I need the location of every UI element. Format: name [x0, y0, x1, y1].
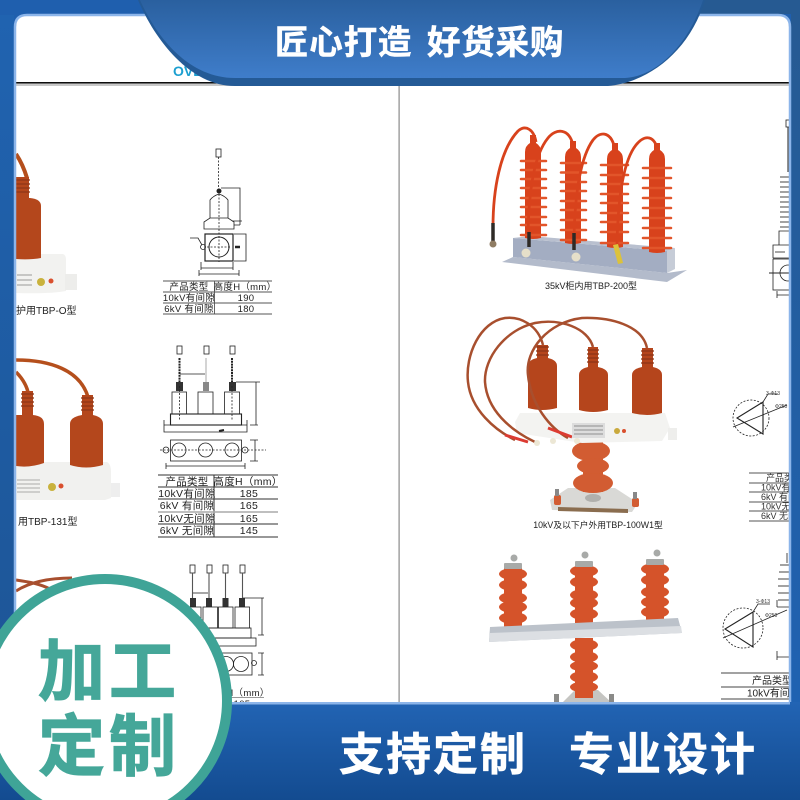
- title: 好货采购: [427, 25, 564, 62]
- dimension drawing: TBP-131: [160, 346, 266, 469]
- clipped catalogue heading: OVER: [173, 63, 213, 79]
- table fragment: four-pole unit: [170, 687, 270, 710]
- slogan: 支持定制: [339, 729, 527, 780]
- table: TBP-O heights: 180: [238, 304, 254, 315]
- banner: bottom strip: [0, 702, 800, 800]
- table: TBP-O heights: 产品类型: [169, 281, 209, 293]
- badge text: 定制: [38, 710, 180, 785]
- dimension drawing: triangle plate upper: [733, 391, 788, 436]
- catalogue content: [16, 63, 800, 710]
- caption: TBP-131: 用TBP-131型: [18, 515, 77, 528]
- title: 匠心打造: [275, 25, 412, 62]
- caption: TBP-100W1: 10kV及以下户外用TBP-100W1型: [533, 519, 663, 530]
- table fragment: right upper: [749, 472, 800, 521]
- dimension drawing: triangle plate upper: 3-Φ13: [766, 391, 780, 397]
- caption: TBP-200: 35kV柜内用TBP-200型: [545, 280, 637, 291]
- table: TBP-O heights: 6kV 有间隙: [164, 303, 214, 315]
- center divider: [398, 86, 400, 704]
- table: TBP-O heights: 190: [238, 293, 254, 304]
- table: TBP-131 heights: 10kV有间隙: [158, 487, 216, 500]
- table: TBP-131 heights: 165: [240, 500, 258, 512]
- table: TBP-O heights: 10kV有间隙: [163, 292, 215, 304]
- table fragment: right lower: 10kV有间隙: [747, 686, 800, 700]
- title: [275, 25, 564, 62]
- caption: TBP-O: 护用TBP-O型: [16, 304, 77, 317]
- product photo: TBP-131: [16, 360, 120, 500]
- table fragment: four-pole unit: H（mm）: [226, 687, 270, 699]
- product photo: 10kV TBP-100W1: [468, 318, 677, 513]
- dimension drawing: triangle plate upper: Φ250: [775, 404, 788, 410]
- product photo: TBP-O: [16, 154, 77, 293]
- product photo: outdoor three-phase unit: [489, 550, 682, 703]
- table fragment: four-pole unit: 105: [234, 699, 250, 710]
- dimension drawing: triangle plate lower: 3-Φ13: [756, 599, 770, 605]
- table: TBP-131 heights: 10kV无间隙: [158, 512, 216, 525]
- table: TBP-131 heights: 6kV 无间隙: [160, 524, 214, 537]
- table: TBP-131 heights: 145: [240, 525, 258, 537]
- banner: top header: [138, 0, 705, 86]
- table: TBP-O heights: 高度H（mm）: [214, 281, 276, 293]
- table: TBP-O heights: [163, 281, 276, 315]
- badge text: [38, 635, 180, 785]
- table: TBP-131 heights: 165: [240, 513, 258, 525]
- slogan: [339, 729, 757, 780]
- dimension drawing: right edge top: [769, 120, 796, 298]
- dimension drawing: four-pole unit: [175, 565, 264, 675]
- slogan: 专业设计: [569, 729, 757, 780]
- product photo: wires behind badge: [16, 578, 72, 591]
- product photo: 35kV TBP-200: [490, 128, 687, 282]
- table: TBP-131 heights: 185: [240, 488, 258, 500]
- badge: custom processing: [0, 579, 227, 800]
- table: TBP-131 heights: 高度H（mm）: [213, 475, 283, 488]
- table: TBP-131 heights: [158, 475, 283, 537]
- section rule: [16, 82, 790, 86]
- dimension drawing: TBP-O: [190, 149, 246, 276]
- badge text: 加工: [38, 635, 180, 710]
- dimension drawing: triangle plate lower: [723, 553, 790, 660]
- table fragment: right lower: [721, 673, 800, 700]
- dimension drawing: triangle plate lower: Φ250: [765, 613, 778, 619]
- table fragment: right lower: 产品类型: [752, 674, 792, 687]
- table: TBP-131 heights: 产品类型: [165, 475, 209, 488]
- table: TBP-131 heights: 6kV 有间隙: [160, 499, 214, 512]
